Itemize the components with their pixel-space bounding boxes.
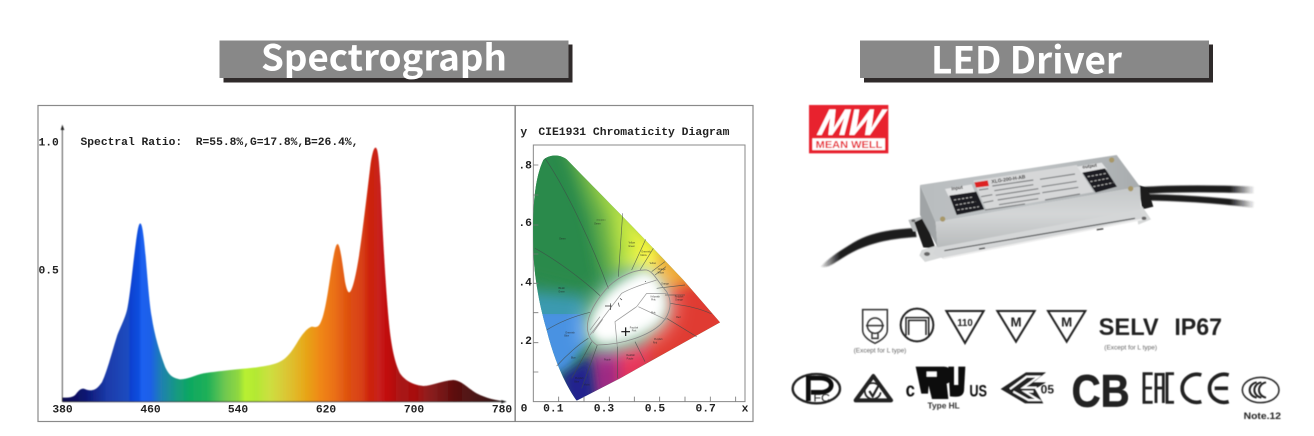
heading: LED Driver (860, 30, 1213, 84)
x tick labels (521, 404, 749, 416)
colour name labels: Pink (651, 300, 656, 302)
hue region lines (535, 158, 712, 388)
colour name labels: Purple (604, 358, 611, 361)
colour name labels: Yellowish (596, 220, 606, 222)
case left side (920, 185, 938, 247)
colour name labels: Red (676, 317, 681, 319)
colour name labels: Red (653, 342, 658, 344)
plot box (533, 145, 745, 402)
y tick labels: .4 (518, 277, 532, 289)
rail clips (979, 229, 1103, 249)
colour name labels: Greenish (565, 331, 575, 334)
y tick labels: .2 (518, 336, 532, 348)
panel: spectrograph frame (38, 106, 753, 422)
output tag background (1077, 163, 1107, 173)
icon: cURus mark: c (906, 379, 915, 402)
colour name labels: Yellow (640, 255, 647, 257)
white point cross marker (621, 327, 630, 336)
icon: ENEC 05: 05 (1041, 382, 1054, 396)
cable gland (914, 218, 936, 249)
heading: LED Driver: LED Driver (931, 30, 1123, 84)
colour name labels: Purplish (575, 377, 584, 380)
spectral ratio text: Spectral Ratio: R=55.8%,G=17.8%,B=26.4%, (80, 137, 358, 149)
colour name labels: Pink (632, 331, 637, 333)
icon: CE mark (1182, 374, 1229, 402)
panel divider (514, 106, 516, 422)
x tick labels: 0 (521, 404, 528, 416)
x axis labels: 780 (492, 404, 512, 416)
heading: Spectrograph: Spectrograph (261, 30, 507, 82)
caption: Note.12: Note.12 (1244, 411, 1281, 421)
y ticks and x ticks (533, 165, 736, 402)
colour name labels: Orange (675, 299, 684, 302)
icon: circle frame (901, 309, 933, 341)
mounting holes (911, 217, 1146, 256)
x axis labels (52, 404, 512, 416)
lower left tab (919, 245, 945, 262)
colour name labels: Bluish (558, 288, 566, 290)
y axis labels: 0.5 (38, 266, 59, 278)
colour name labels: Purplish (630, 327, 639, 330)
text: SELV: SELV (1099, 315, 1159, 341)
x tick labels: 0.7 (695, 404, 716, 416)
icon: shield lamp (863, 310, 887, 343)
planckian markers (605, 282, 646, 310)
colour gamut (533, 156, 720, 400)
output cable lower (1142, 197, 1254, 205)
colour name labels: Orange (658, 268, 666, 271)
x tick labels: 0.3 (594, 404, 614, 416)
icon: CCC mark (1242, 377, 1279, 403)
caption: except for L type: (Except for L type) (1104, 344, 1157, 351)
case top (920, 155, 1140, 222)
icon: triangle 110 (946, 311, 984, 343)
spectrum curve (62, 148, 503, 402)
icon: cURus mark: US (969, 382, 987, 401)
output cable upper (1140, 189, 1254, 191)
diagram heading: CIE1931 Chromaticity Diagram (538, 127, 730, 139)
heading: Spectrograph (220, 30, 572, 82)
icon: PFC (793, 374, 840, 405)
colour name labels: Blue (571, 358, 576, 360)
left mounting tab (908, 216, 932, 232)
icon: triangle M (1048, 311, 1085, 342)
colour name labels: Green (559, 238, 566, 241)
caption: except for L type: (Except for L type) (854, 347, 906, 354)
colour name labels (558, 220, 684, 386)
colour name labels: Purple (627, 357, 634, 360)
screw dots (940, 157, 1133, 222)
product photo: LED driver (908, 155, 1153, 262)
colour name labels: Green (558, 290, 566, 293)
colour name labels: Green (594, 222, 601, 225)
colour name labels: Reddish (626, 355, 636, 357)
y tick labels: .6 (518, 218, 532, 230)
chart: spectral distribution (61, 125, 507, 403)
icon: ENEC 05 (1001, 372, 1054, 403)
output tag: output (1082, 163, 1098, 170)
text: IP67: IP67 (1174, 315, 1222, 341)
x axis labels: 460 (140, 404, 161, 416)
output block (1082, 168, 1117, 193)
main label (973, 165, 1094, 211)
logo: Mean Well (809, 105, 888, 153)
red badge (974, 180, 989, 188)
model text: XLG-200-H-AB (991, 174, 1026, 185)
right cable entry (1138, 185, 1153, 209)
case front (936, 187, 1141, 247)
output rows (1088, 173, 1113, 187)
logo label (812, 138, 885, 150)
diagram axis letter: y (520, 127, 527, 139)
safety and certification icons (793, 309, 1281, 421)
colour name labels: Pink (651, 312, 656, 314)
icon: PFC: FC (813, 393, 830, 405)
axes (62, 128, 503, 402)
input tag: input (951, 185, 964, 191)
central white region outline (587, 270, 670, 345)
x axis labels: 700 (404, 404, 424, 416)
colour name labels: Blue (564, 336, 570, 338)
x tick labels: x (742, 404, 749, 416)
colour name labels: Yellow (649, 263, 656, 265)
chart: CIE1931 chromaticity diagram (518, 127, 750, 416)
colour name labels: Yellow (657, 272, 664, 274)
product cables (821, 189, 1254, 267)
input block (949, 192, 984, 215)
x tick labels: 0.5 (645, 404, 665, 416)
colour name labels: Purplish (654, 338, 663, 341)
caption: Type HL: Type HL (928, 400, 960, 410)
y tick labels: .8 (518, 160, 532, 172)
x axis labels: 620 (316, 404, 336, 416)
text: CB mark: CB (1072, 366, 1130, 417)
icon: triangle 110: 110 (957, 318, 973, 329)
y tick labels (518, 160, 532, 348)
y axis labels: 1.0 (38, 138, 59, 150)
colour name labels: Blue (574, 381, 580, 383)
x axis labels: 540 (228, 404, 248, 416)
icon: triangle M: M (1010, 315, 1022, 330)
logo text: MEAN WELL (816, 140, 882, 151)
colour name labels: Green (628, 245, 636, 248)
icon: EAC mark (1144, 374, 1174, 403)
icon: triangle M: M (1061, 315, 1072, 330)
y axis labels (38, 138, 59, 278)
icon: cURus mark (906, 367, 987, 410)
colour name labels: Yellowish (650, 297, 661, 299)
input cable (821, 228, 917, 267)
right mounting tab (1135, 207, 1151, 225)
logo mark (817, 109, 888, 135)
colour name labels: Violet (584, 383, 590, 386)
icon: RCM triangle (856, 376, 891, 400)
colour name labels: Yellow (628, 243, 635, 245)
case rail (933, 207, 1143, 259)
label print (979, 174, 1080, 210)
icon: triangle M (997, 311, 1035, 342)
input tag background (945, 184, 975, 197)
x axis labels: 380 (52, 404, 73, 416)
colour name labels: Orange (661, 282, 670, 285)
colour name labels: Greenish (641, 251, 651, 254)
colour name labels: Reddish (675, 296, 684, 298)
input rows (954, 197, 979, 210)
rail groove (944, 218, 1135, 251)
x tick labels: 0.1 (543, 404, 564, 416)
